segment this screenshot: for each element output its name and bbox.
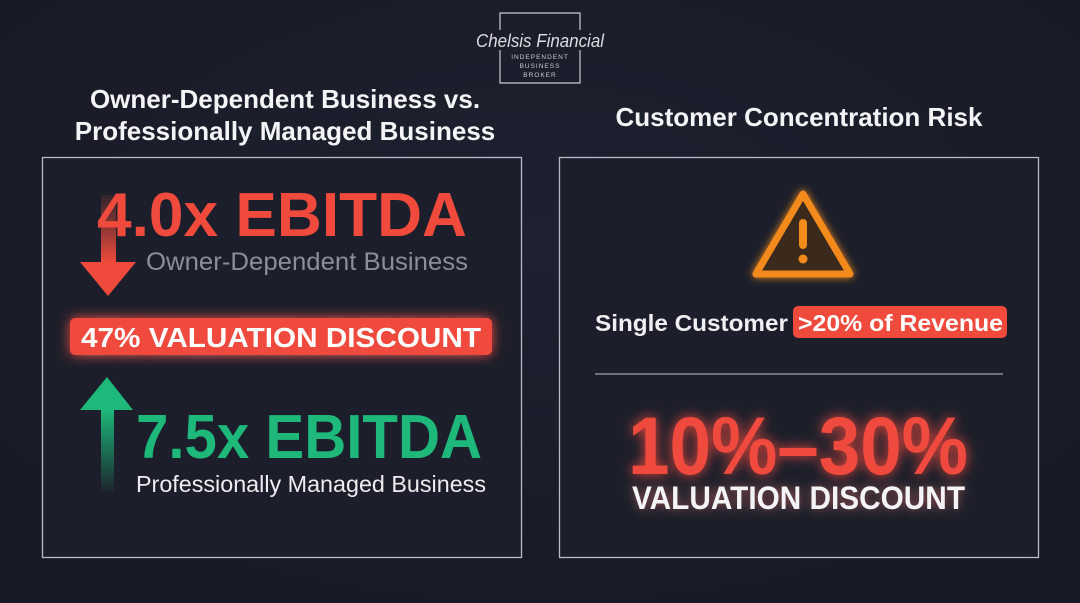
pill: >20% of revenue: >20% of Revenue <box>798 310 1003 336</box>
text: single customer: Single Customer <box>595 310 788 336</box>
title: left: Owner-Dependent Business vs. <box>90 84 480 114</box>
label: owner-dependent: Owner-Dependent Business <box>146 248 468 276</box>
logo: Chelsis Financial <box>476 31 605 51</box>
panel: owner-dependent vs professional <box>42 158 522 558</box>
logo: INDEPENDENT <box>511 54 569 61</box>
metric: 7.5x EBITDA: 7.5x EBITDA <box>136 403 482 472</box>
logo: BUSINESS <box>520 63 560 70</box>
label: valuation discount: VALUATION DISCOUNT <box>632 480 965 516</box>
logo: BROKER <box>523 72 557 79</box>
title: right: Customer Concentration Risk <box>616 102 983 132</box>
metric: 4.0x EBITDA: 4.0x EBITDA <box>97 181 467 250</box>
pill: 47% valuation discount: 47% VALUATION DISCOUNT <box>81 322 481 353</box>
icon: warning triangle <box>756 194 850 274</box>
metric: 10%-30%: 10%–30% <box>628 401 968 492</box>
title: left: Professionally Managed Business <box>75 116 495 146</box>
panel: customer concentration <box>560 158 1038 558</box>
label: professionally managed: Professionally Managed Business <box>136 471 486 497</box>
title: left <box>75 84 495 146</box>
arrow: down red <box>80 195 136 296</box>
arrow: up green <box>80 377 133 491</box>
logo <box>476 13 605 83</box>
